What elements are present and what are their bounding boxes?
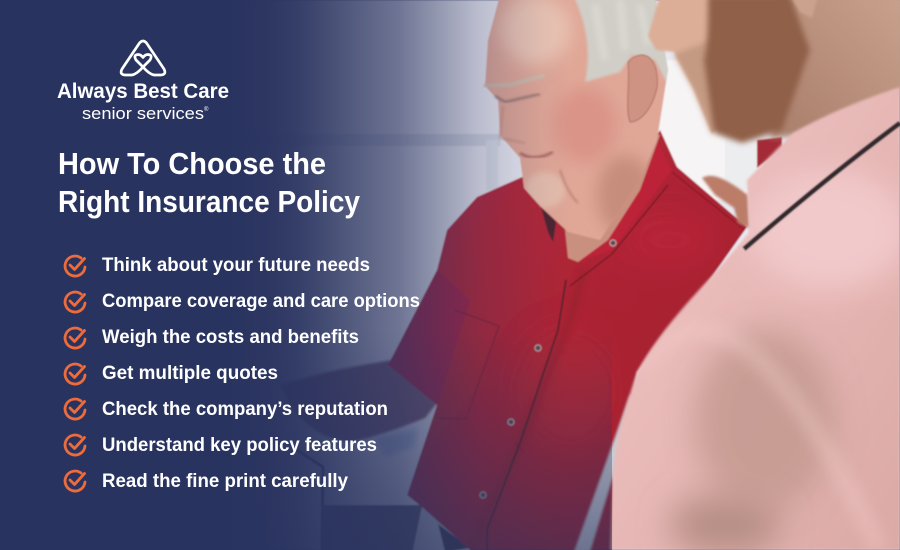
photo: paper on table xyxy=(375,428,418,457)
photo: older man's face xyxy=(484,0,672,240)
logo tagline: senior services xyxy=(82,104,204,123)
item: reputation: Check the company’s reputation xyxy=(102,399,388,420)
item: compare coverage: Compare coverage and care options xyxy=(102,291,420,312)
shirt placket xyxy=(487,280,566,550)
title xyxy=(58,146,361,219)
gradient overlay: navy fade xyxy=(0,0,570,550)
ear xyxy=(628,55,657,122)
checklist xyxy=(65,255,420,492)
eyebrow xyxy=(484,75,545,86)
photo: hand on shoulder xyxy=(702,176,750,228)
mouth xyxy=(520,152,553,157)
icon: house and heart xyxy=(121,41,165,75)
gradient overlay: bottom shade xyxy=(0,330,612,550)
photo: shirt collar left xyxy=(541,207,556,242)
photo: caregiver's neck xyxy=(770,0,900,138)
registered mark: ® xyxy=(204,106,209,113)
photo: older man's arm xyxy=(280,360,438,442)
pocket xyxy=(437,310,499,419)
photo: caregiver's pink shirt xyxy=(610,87,900,550)
photo: red shirt sliver behind caregiver xyxy=(757,137,782,168)
logo name: Always Best Care xyxy=(57,80,229,103)
item: costs and benefits: Weigh the costs and benefits xyxy=(102,327,359,348)
photo: clipboard xyxy=(574,395,637,550)
title: Right Insurance Policy xyxy=(58,184,361,219)
item: policy features: Understand key policy features xyxy=(102,435,377,456)
title: How To Choose the xyxy=(58,146,326,181)
photo: older man and caregiver xyxy=(284,0,900,550)
photo: trousers xyxy=(412,506,470,550)
photo: neck xyxy=(565,130,660,262)
shirt buttons xyxy=(480,226,616,498)
jowl line xyxy=(560,170,578,203)
hair xyxy=(573,0,672,85)
photo: caregiver's face xyxy=(648,0,818,143)
item: multiple quotes: Get multiple quotes xyxy=(102,363,278,384)
photo: older man's red shirt xyxy=(388,130,747,550)
nose shadow xyxy=(500,106,525,143)
lanyard xyxy=(744,123,900,249)
item: fine print: Read the fine print carefully xyxy=(102,471,348,492)
eye xyxy=(495,94,540,102)
item: future needs: Think about your future needs xyxy=(102,255,370,276)
logo xyxy=(57,41,229,123)
